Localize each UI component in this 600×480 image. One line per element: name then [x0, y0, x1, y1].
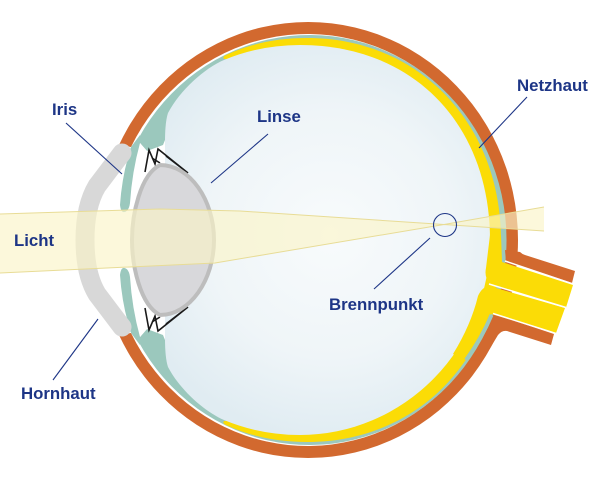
nerve upper band [486, 235, 573, 308]
leader lines [53, 97, 527, 380]
nerve lower sheath [469, 314, 554, 361]
beam edges [0, 207, 544, 273]
label: Brennpunkt: Brennpunkt [329, 295, 424, 314]
focal point circle [434, 214, 456, 236]
cornea [85, 153, 122, 327]
label: Linse: Linse [257, 107, 301, 126]
light beam [0, 207, 544, 273]
label: Iris: Iris [52, 100, 77, 119]
nerve upper sheath [505, 250, 575, 283]
iris lower [120, 268, 140, 345]
retina teal edge at nerve [466, 315, 492, 360]
retina [223, 38, 501, 442]
beam fill [0, 207, 544, 273]
zonular fibres [145, 149, 188, 331]
label: Licht: Licht [14, 231, 54, 250]
choroid [133, 35, 507, 445]
optic nerve [453, 235, 575, 361]
sclera [119, 22, 518, 458]
nerve lower band [453, 286, 565, 359]
lens [132, 165, 214, 315]
label: Netzhaut: Netzhaut [517, 76, 588, 95]
eyeball [119, 22, 518, 458]
white anterior chamber [128, 143, 165, 337]
nerve white gaps [489, 261, 573, 334]
vitreous body [165, 45, 490, 435]
label: Hornhaut: Hornhaut [21, 384, 96, 403]
iris upper [120, 135, 140, 212]
